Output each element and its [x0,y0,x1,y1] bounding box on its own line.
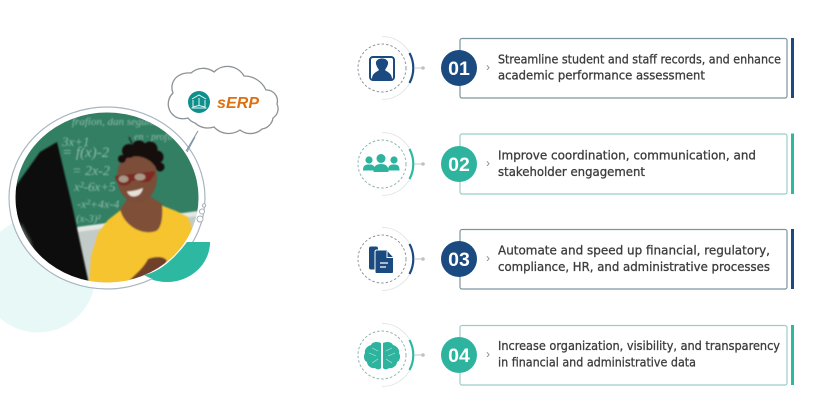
card 2: stakeholder engagement [498,165,645,179]
chalk writing [61,116,174,225]
card 3: Automate and speed up financial, regulatory, [498,244,770,258]
number 01: 01 [448,58,470,80]
card 1: academic performance assessment [498,68,705,82]
row 3 [358,228,794,290]
number 02: 02 [448,154,470,176]
card 3: › [486,251,490,265]
cloud with sERP logo [168,66,278,134]
icon ring 2 [358,132,425,196]
teal half circle [120,242,210,282]
thought bubbles [197,204,206,222]
icon: person portrait [370,57,394,80]
number 03: 03 [448,249,470,271]
card 4: in financial and administrative data [498,356,696,370]
card 3 [460,229,794,289]
chalk writing: = f(x)-2 [62,145,110,161]
icon ring 4 [358,324,425,386]
number 03 [441,241,477,277]
icon ring 3 [358,228,425,290]
chalk writing: frafion, dan seguntu [72,116,161,128]
chalk writing: en · profir [134,132,174,143]
callout connector [186,131,198,152]
card 2 [460,134,794,194]
card 4: Increase organization, visibility, and transparency [498,339,780,353]
chalk writing: (x-3)² [76,213,101,225]
pale decorative circle [0,218,96,332]
number 04: 04 [448,345,470,367]
icon: group of people [363,154,400,172]
logo text: sERP [217,95,259,112]
icon: brain [364,342,400,369]
card 1: Streamline student and staff records, and enhance [498,52,781,66]
chalk writing: 3x+1 [61,134,90,149]
logo icon: book [188,91,210,113]
icon ring 1 [358,36,425,100]
chalk writing: = 2x-2 [72,164,110,179]
teal half circle overlap [144,242,210,281]
card 2: Improve coordination, communication, and [498,148,756,162]
row 2 [358,132,794,196]
number 02 [441,146,477,182]
card 1 [460,38,794,98]
photo: teacher at chalkboard [15,112,200,284]
row 1 [358,36,794,100]
card 2: › [486,156,490,170]
card 4: › [486,347,490,361]
chalk writing: x²-6x+5 [73,179,116,194]
number 01 [441,50,477,86]
photo frame ring [9,107,205,289]
card 3: compliance, HR, and administrative processes [498,260,770,274]
icon: documents [369,246,394,274]
number 04 [441,337,477,373]
card 1: › [486,60,490,74]
row 4 [358,324,794,386]
card 4 [460,325,794,385]
chalk writing: -x²+4x-4 [77,197,119,211]
